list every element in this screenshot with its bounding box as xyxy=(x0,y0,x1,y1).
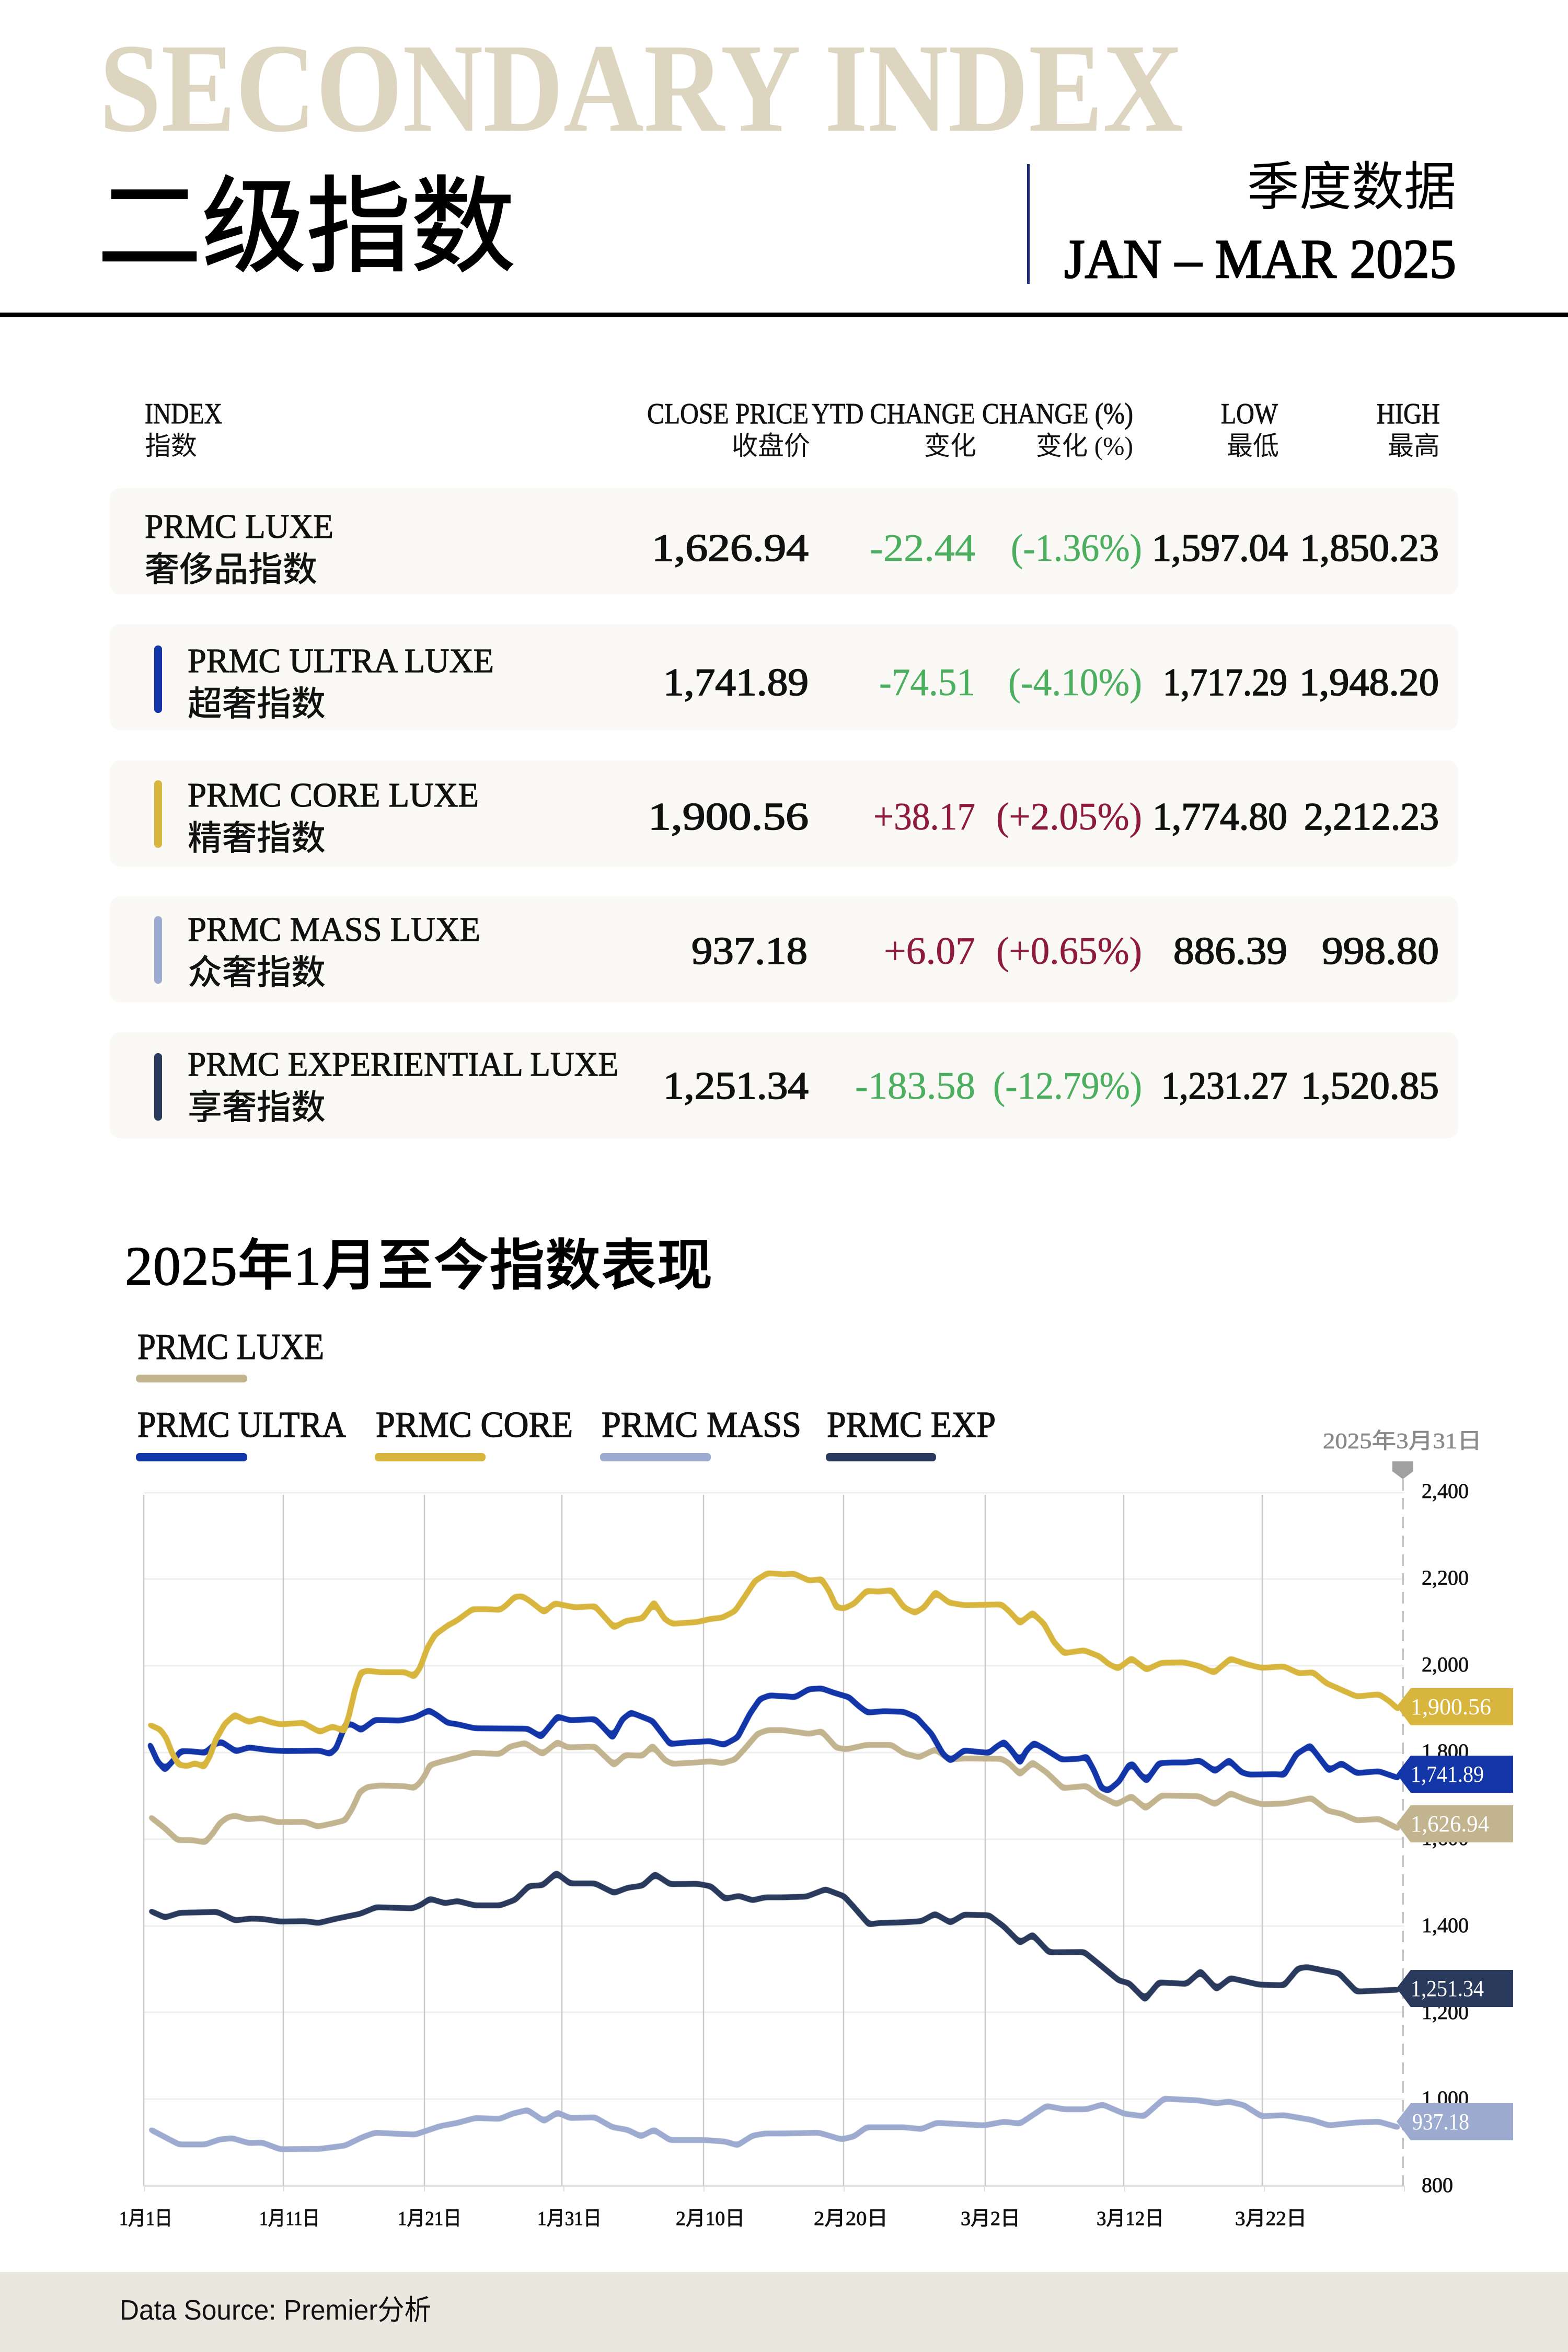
series: PRMC MASS xyxy=(151,2099,1398,2149)
series: PRMC LUXE xyxy=(151,1730,1398,1842)
x axis labels: 1月11日 xyxy=(259,2208,320,2230)
panel: PRMC LUXE row: 1,597.04 xyxy=(1152,527,1288,570)
table header xyxy=(145,398,1440,460)
panel: PRMC ULTRA LUXE row: -74.51 xyxy=(879,661,975,704)
legend: PRMC CORE xyxy=(376,1405,573,1445)
panel: PRMC ULTRA LUXE row: 1,741.89 xyxy=(663,661,809,704)
panel: PRMC CORE LUXE row: (+2.05%) xyxy=(996,795,1142,838)
panel: PRMC MASS LUXE row: 998.80 xyxy=(1322,930,1439,973)
panel: PRMC ULTRA LUXE row: (-4.10%) xyxy=(1008,661,1142,704)
y axis labels: 2,000 xyxy=(1422,1653,1469,1676)
panel: PRMC CORE LUXE row: PRMC CORE LUXE xyxy=(188,776,479,814)
legend: PRMC ULTRA xyxy=(137,1405,346,1445)
panel: PRMC CORE LUXE row: 1,774.80 xyxy=(1152,795,1287,838)
table header: 收盘价 xyxy=(732,431,810,460)
y axis labels: 2,200 xyxy=(1422,1566,1469,1589)
title: chinese: 二级指数 xyxy=(97,170,515,286)
y axis labels: 1,000 xyxy=(1422,2086,1469,2110)
panel: PRMC LUXE row xyxy=(110,488,1458,594)
panel: PRMC CORE LUXE row: 2,212.23 xyxy=(1304,795,1439,838)
x axis labels: 2月20日 xyxy=(814,2208,888,2230)
panel: PRMC LUXE row: PRMC LUXE xyxy=(145,508,333,546)
header rule xyxy=(0,313,1568,317)
panel: PRMC EXPERIENTIAL LUXE row: 1,251.34 xyxy=(663,1065,809,1108)
value tag: luxe xyxy=(1397,1805,1513,1842)
chart heading: 2025年1月至今指数表现 xyxy=(125,1236,712,1297)
panel: PRMC ULTRA LUXE row: 超奢指数 xyxy=(188,685,326,723)
value tag: ultra: 1,741.89 xyxy=(1411,1761,1484,1787)
x axis labels xyxy=(119,2208,1307,2230)
value tag: experiential: 1,251.34 xyxy=(1411,1976,1484,2001)
table header: INDEX xyxy=(145,398,222,430)
table header: LOW xyxy=(1221,398,1278,430)
panel: PRMC ULTRA LUXE row xyxy=(110,624,1458,730)
panel: PRMC EXPERIENTIAL LUXE row: -183.58 xyxy=(855,1065,975,1108)
table header: 变化 (%) xyxy=(1036,431,1133,460)
legend: PRMC LUXE xyxy=(137,1327,324,1367)
panel: PRMC EXPERIENTIAL LUXE row: PRMC EXPERIENTIAL LUXE xyxy=(188,1045,618,1083)
panel: PRMC LUXE row: -22.44 xyxy=(870,527,975,570)
panel: PRMC ULTRA LUXE row: 1,948.20 xyxy=(1299,661,1439,704)
value tag: luxe: 1,626.94 xyxy=(1411,1811,1489,1837)
subtitle: quarterly data: 季度数据 xyxy=(1247,158,1456,216)
x axis labels: 2月10日 xyxy=(676,2208,745,2230)
panel: PRMC CORE LUXE row: 精奢指数 xyxy=(188,820,326,858)
table header: 指数 xyxy=(145,431,197,460)
y axis labels: 1,400 xyxy=(1422,1913,1469,1937)
date label: 2025年3月31日 xyxy=(1323,1429,1482,1454)
panel: PRMC CORE LUXE row: 1,900.56 xyxy=(648,795,809,838)
subtitle: period: JAN – MAR 2025 xyxy=(1064,228,1456,290)
legend: PRMC EXP xyxy=(827,1405,996,1445)
panel: PRMC CORE LUXE row: +38.17 xyxy=(873,795,975,838)
table header: CLOSE PRICE xyxy=(647,398,809,430)
x axis labels: 1月21日 xyxy=(398,2208,462,2230)
panel: PRMC LUXE row: 奢侈品指数 xyxy=(145,551,317,589)
line chart xyxy=(119,1429,1513,2230)
legend xyxy=(136,1327,996,1461)
x axis labels: 3月22日 xyxy=(1235,2208,1307,2230)
panel: PRMC EXPERIENTIAL LUXE row: 1,520.85 xyxy=(1301,1065,1439,1108)
value tag: mass xyxy=(1397,2103,1513,2140)
panel: PRMC EXPERIENTIAL LUXE row: 1,231.27 xyxy=(1161,1065,1287,1108)
panel: PRMC MASS LUXE row: +6.07 xyxy=(884,930,975,973)
header divider xyxy=(1027,164,1030,284)
panel: PRMC ULTRA LUXE row: 1,717.29 xyxy=(1163,661,1287,704)
panel: PRMC MASS LUXE row: 886.39 xyxy=(1173,930,1287,973)
value tag: core: 1,900.56 xyxy=(1411,1694,1491,1720)
y axis labels: 1,600 xyxy=(1422,1826,1469,1850)
title: english: SECONDARY INDEX xyxy=(99,17,1183,158)
value tag: mass: 937.18 xyxy=(1412,2109,1469,2135)
legend: PRMC MASS xyxy=(602,1405,801,1445)
x axis labels: 1月1日 xyxy=(119,2208,172,2230)
value tag: core xyxy=(1397,1688,1513,1725)
data source: Data Source: Premier分析 xyxy=(120,2295,431,2326)
panel: PRMC MASS LUXE row: 937.18 xyxy=(691,930,808,973)
panel: PRMC CORE LUXE row xyxy=(110,760,1458,867)
table header: 最高 xyxy=(1388,431,1440,460)
x axis labels: 1月31日 xyxy=(537,2208,602,2230)
date marker xyxy=(1392,1461,1413,1479)
footer band xyxy=(0,2272,1568,2352)
x axis labels: 3月12日 xyxy=(1097,2208,1164,2230)
table header: 变化 xyxy=(924,431,976,460)
panel: PRMC MASS LUXE row: 众奢指数 xyxy=(188,954,326,992)
y axis labels: 1,200 xyxy=(1422,2000,1469,2024)
panel: PRMC LUXE row: 1,626.94 xyxy=(652,527,809,570)
value tag: ultra xyxy=(1397,1756,1513,1793)
y axis labels: 1,800 xyxy=(1422,1739,1469,1763)
y axis labels xyxy=(1422,1479,1469,2197)
value tag: experiential xyxy=(1397,1970,1513,2007)
panel: PRMC EXPERIENTIAL LUXE row: 享奢指数 xyxy=(188,1089,326,1127)
series: PRMC ULTRA xyxy=(150,1688,1398,1791)
panel: PRMC MASS LUXE row xyxy=(110,896,1458,1002)
panel: PRMC MASS LUXE row: PRMC MASS LUXE xyxy=(188,910,480,949)
table header: YTD CHANGE xyxy=(812,398,975,430)
panel: PRMC ULTRA LUXE row: PRMC ULTRA LUXE xyxy=(188,642,494,680)
table header: CHANGE (%) xyxy=(982,398,1133,430)
table header: HIGH xyxy=(1377,398,1440,430)
table header: 最低 xyxy=(1227,431,1279,460)
panel: PRMC MASS LUXE row: (+0.65%) xyxy=(996,930,1142,973)
x axis labels: 3月2日 xyxy=(961,2208,1020,2230)
series: PRMC EXP xyxy=(151,1873,1398,1999)
panel: PRMC LUXE row: (-1.36%) xyxy=(1011,527,1142,570)
panel: PRMC LUXE row: 1,850.23 xyxy=(1300,527,1439,570)
panel: PRMC EXPERIENTIAL LUXE row xyxy=(110,1032,1458,1138)
panel: PRMC EXPERIENTIAL LUXE row: (-12.79%) xyxy=(993,1065,1142,1108)
series: PRMC CORE xyxy=(150,1573,1398,1767)
y axis labels: 2,400 xyxy=(1422,1479,1469,1503)
y axis labels: 800 xyxy=(1422,2173,1453,2197)
